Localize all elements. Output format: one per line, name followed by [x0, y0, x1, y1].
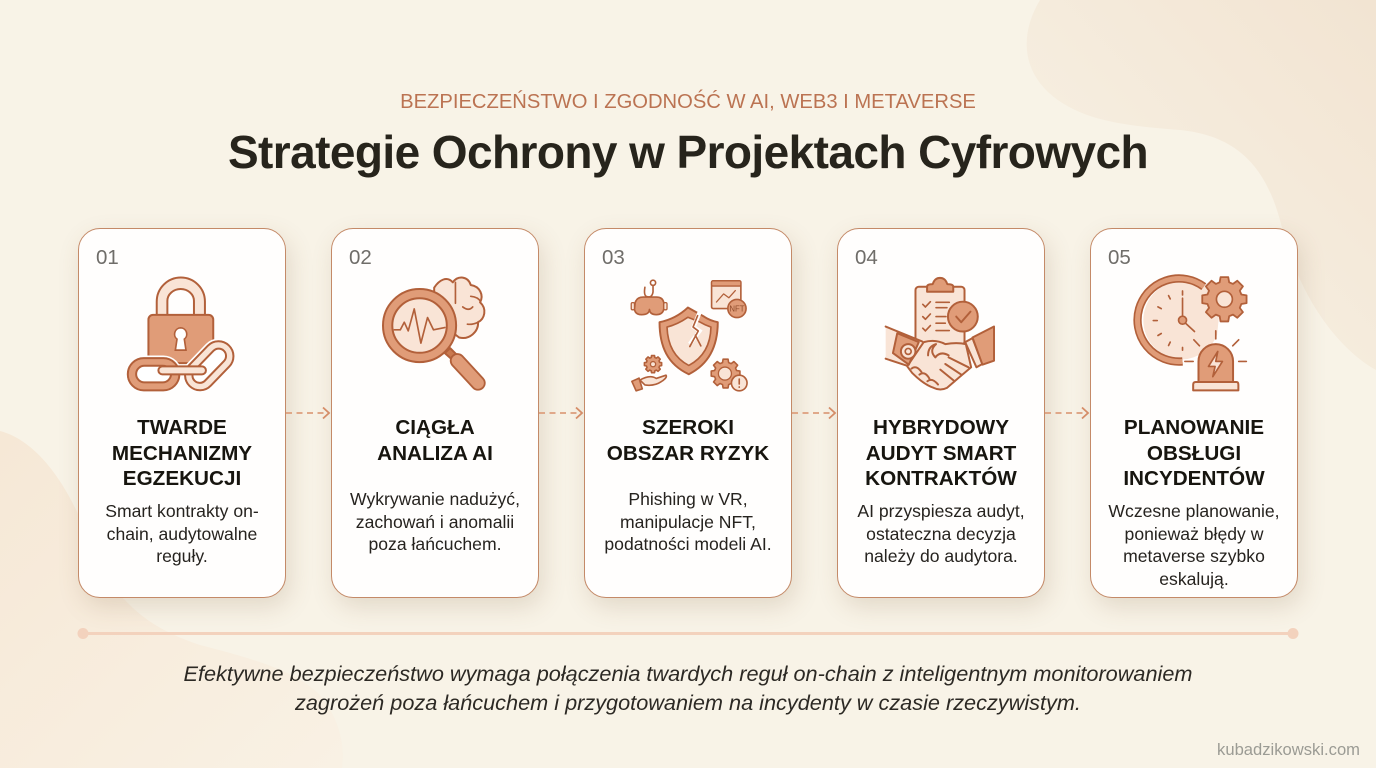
arrow 3 to 4 — [792, 406, 836, 420]
icon: padlock and chain — [126, 276, 234, 392]
icon: clipboard and handshake — [884, 276, 995, 390]
heading: INCYDENTÓW — [1123, 467, 1265, 490]
panel: 02 — [331, 228, 539, 598]
description: Smart kontrakty on- — [105, 501, 259, 521]
gear with warning — [711, 359, 747, 391]
description: Wykrywanie nadużyć, — [350, 489, 520, 509]
description: ostateczna decyzja — [866, 524, 1016, 544]
arrow 4 to 5 — [1045, 406, 1090, 420]
timeline divider — [78, 628, 1298, 639]
arrow 1 to 2 — [286, 406, 330, 420]
icon: cracked shield with risks — [630, 279, 748, 392]
heading: SZEROKI — [642, 416, 734, 439]
watermark: kubadzikowski.com — [1217, 740, 1360, 759]
heading — [377, 416, 493, 464]
description: należy do audytora. — [864, 546, 1018, 566]
panel: 03 — [584, 228, 792, 598]
heading: HYBRYDOWY — [873, 416, 1009, 439]
closing statement: zagrożeń poza łańcuchem i przygotowaniem na incydenty w czasie rzeczywistym. — [295, 690, 1081, 715]
description: Wczesne planowanie, — [1108, 501, 1280, 521]
NFT chart window: NFT — [729, 304, 745, 313]
heading: AUDYT SMART — [866, 442, 1016, 464]
description: manipulacje NFT, — [620, 512, 756, 532]
heading — [865, 416, 1017, 490]
heading: MECHANIZMY — [112, 442, 252, 464]
description — [350, 489, 520, 554]
heading: TWARDE — [137, 416, 227, 439]
title: Strategie Ochrony w Projektach Cyfrowych — [228, 126, 1148, 178]
heading: OBSZAR RYZYK — [607, 442, 769, 464]
description: Phishing w VR, — [628, 489, 748, 509]
heading — [607, 416, 769, 464]
icon: magnifier over brain — [382, 276, 486, 391]
heading — [1123, 416, 1265, 490]
closing statement: Efektywne bezpieczeństwo wymaga połączenia twardych reguł on-chain z inteligentnym monitorowaniem — [184, 661, 1192, 686]
description: metaverse szybko — [1123, 546, 1265, 566]
panel: 04 — [837, 228, 1045, 598]
description: eskalują. — [1159, 568, 1229, 588]
description: podatności modeli AI. — [604, 534, 772, 554]
VR goggles with hook — [631, 280, 667, 315]
heading: EGZEKUCJI — [123, 467, 241, 490]
heading: OBSŁUGI — [1147, 442, 1241, 464]
description: zachowań i anomalii — [356, 512, 514, 532]
step number 05: 05 — [1108, 246, 1131, 269]
description: reguły. — [156, 546, 208, 566]
step number 03: 03 — [602, 246, 625, 269]
kicker: BEZPIECZEŃSTWO I ZGODNOŚĆ W AI, WEB3 I METAVERSE — [400, 90, 976, 112]
heading: ANALIZA AI — [377, 442, 493, 464]
step number 01: 01 — [96, 246, 119, 269]
description — [857, 501, 1025, 566]
panel: 01 — [78, 228, 286, 598]
icon: clock, gear and alarm — [1133, 274, 1248, 392]
hand holding gear — [632, 356, 666, 391]
description — [105, 501, 259, 566]
closing statement — [184, 661, 1192, 715]
heading: CIĄGŁA — [395, 416, 475, 439]
heading: PLANOWANIE — [1124, 416, 1264, 439]
description: poza łańcuchem. — [368, 534, 502, 554]
arrow 2 to 3 — [539, 406, 584, 420]
description: ponieważ błędy w — [1125, 524, 1263, 544]
heading — [112, 416, 252, 490]
panel: 05 — [1090, 228, 1298, 598]
description: AI przyspiesza audyt, — [857, 501, 1025, 521]
description: chain, audytowalne — [107, 524, 257, 544]
step number 02: 02 — [349, 246, 372, 269]
description — [604, 489, 772, 554]
shield — [660, 308, 718, 374]
heading: KONTRAKTÓW — [865, 467, 1017, 490]
step number 04: 04 — [855, 246, 878, 269]
description — [1108, 501, 1280, 588]
